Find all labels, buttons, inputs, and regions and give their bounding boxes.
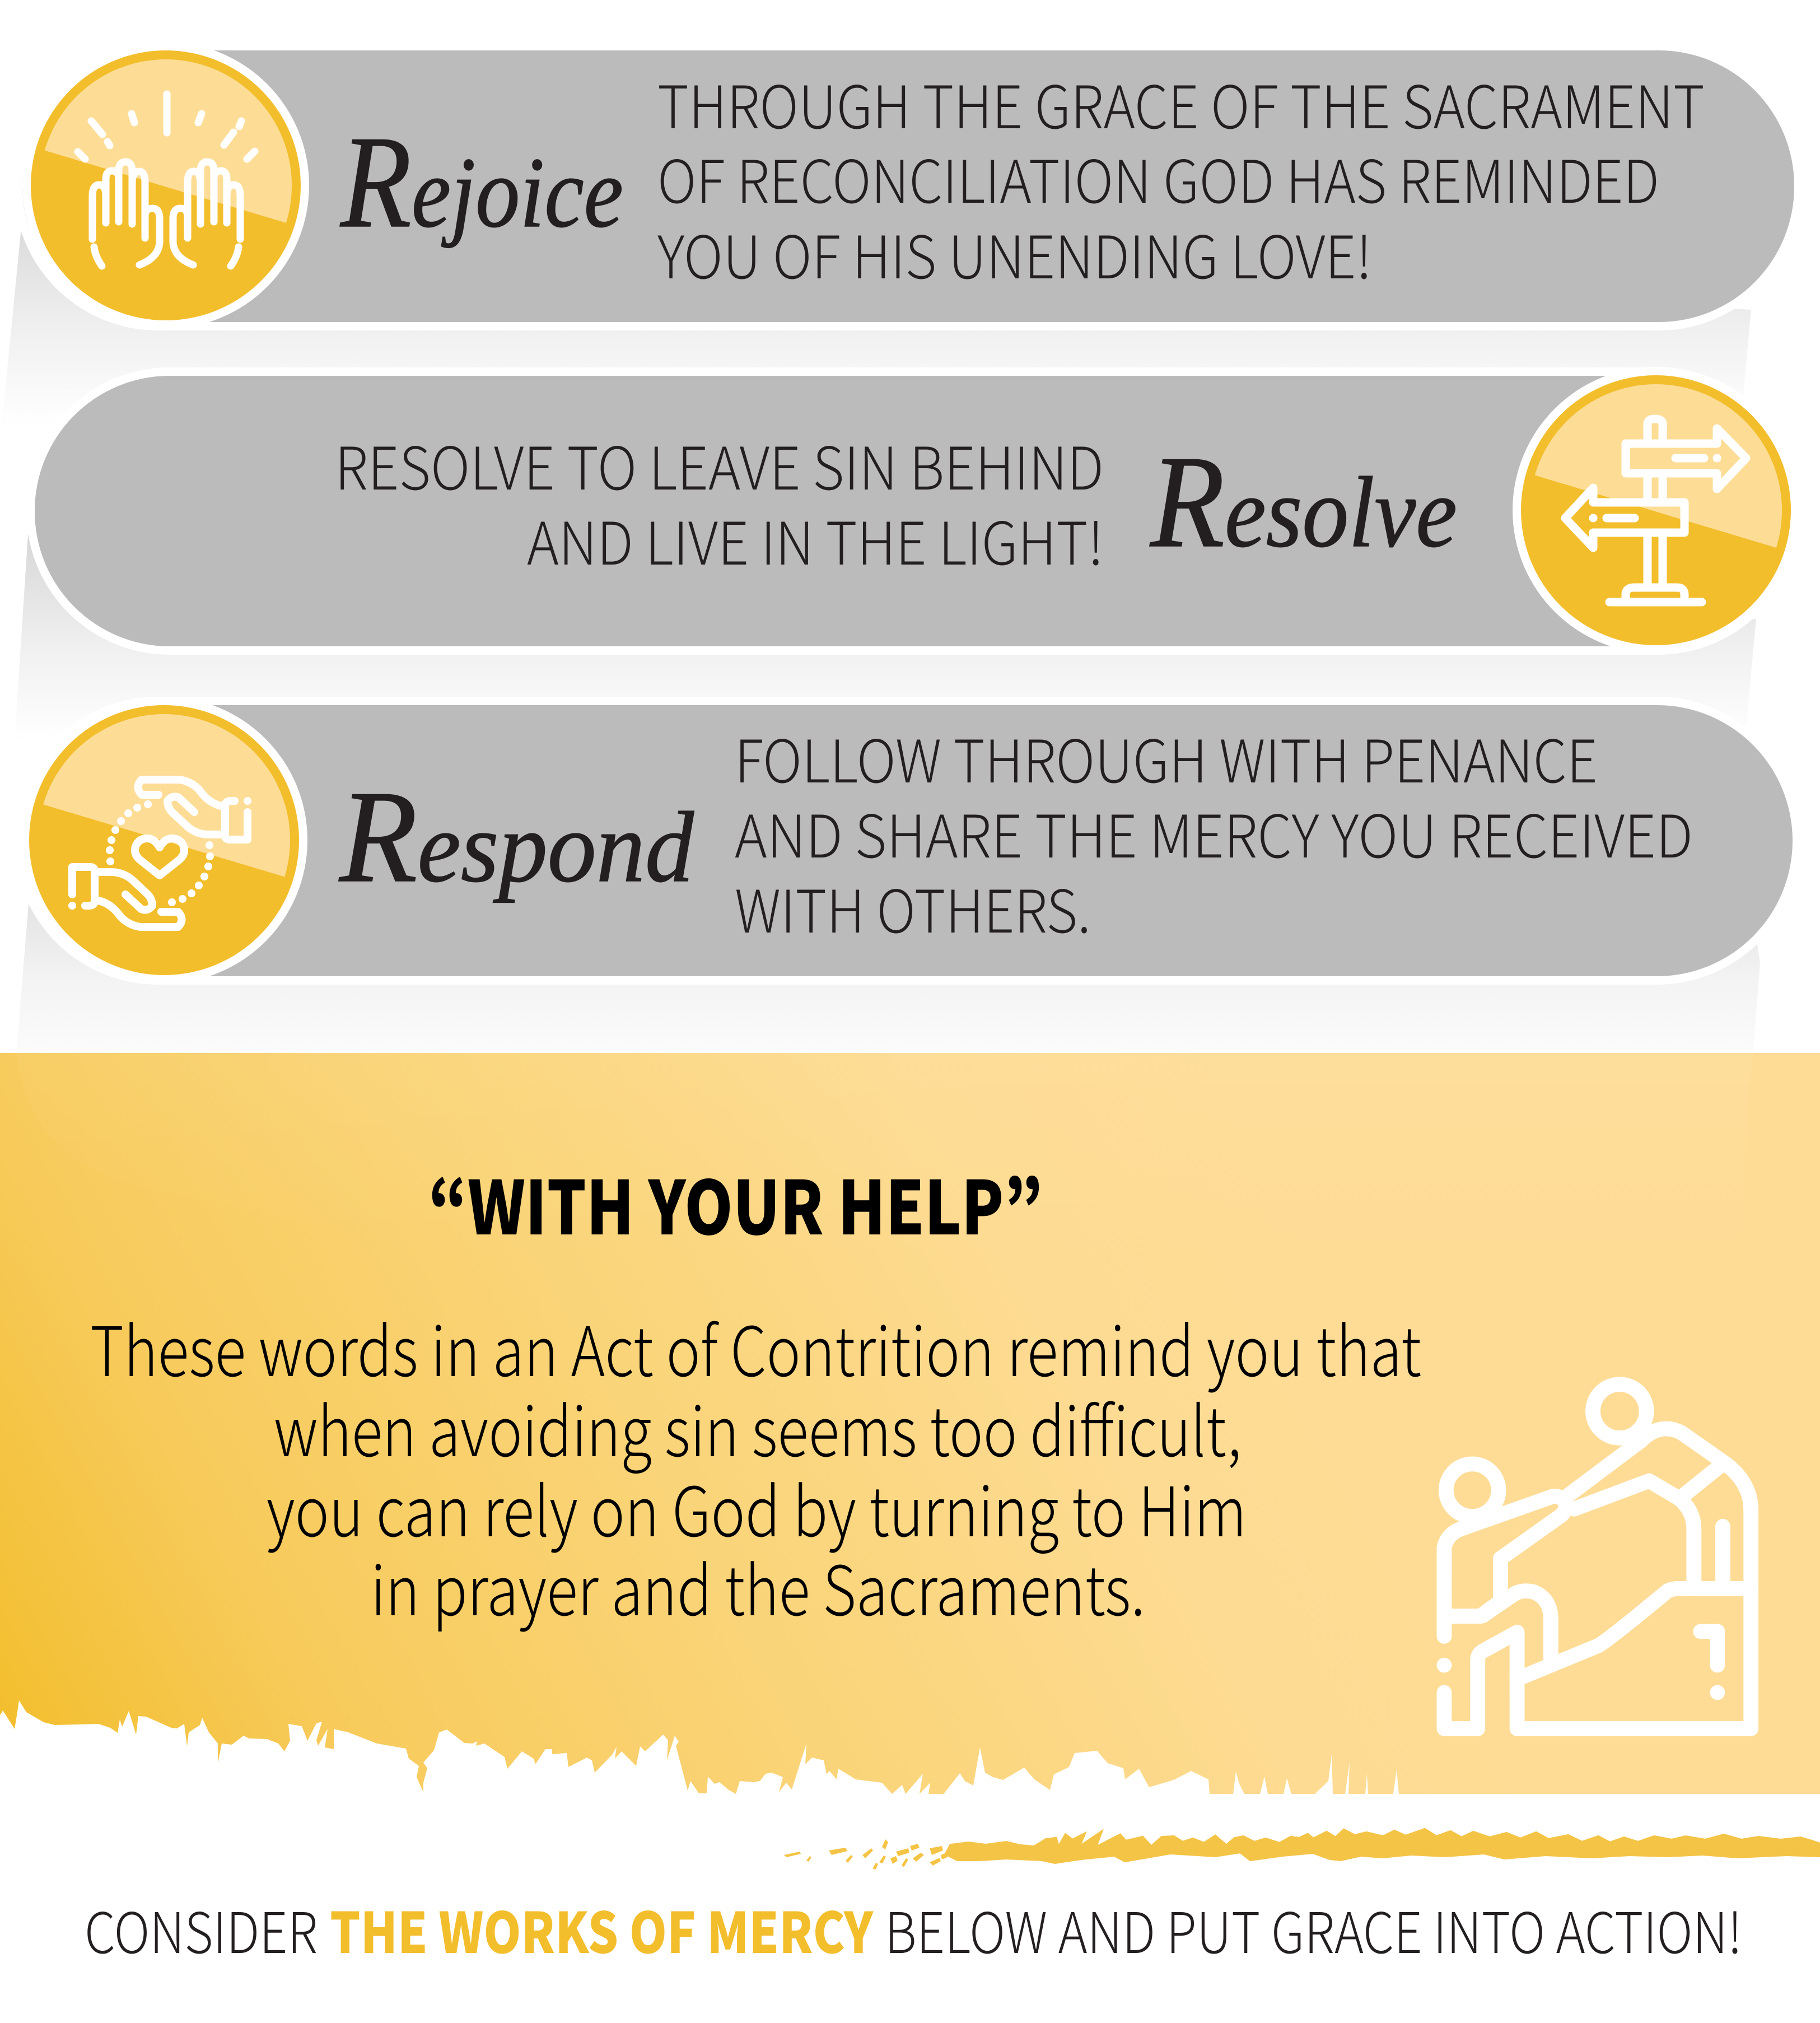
text: act of contrition paragraph: when avoiding sin seems too difficult, xyxy=(274,1377,1242,1476)
drop shadow: third banner xyxy=(16,891,1760,1054)
icon: signpost xyxy=(1513,367,1793,646)
heading: with your help: “WITH YOUR HELP” xyxy=(428,1149,1043,1256)
heading: resolve: Resolve xyxy=(1149,429,1457,575)
text: resolve body: RESOLVE TO LEAVE SIN BEHIND xyxy=(335,422,1104,507)
pill background xyxy=(22,50,1794,322)
text: act of contrition paragraph: in prayer and the Sacraments. xyxy=(371,1536,1145,1635)
panel: shadow overlay on panel top xyxy=(16,1053,1753,1266)
text: rejoice body: THROUGH THE GRACE OF THE SACRAMENT xyxy=(657,60,1705,146)
icon: raised hands xyxy=(22,50,309,322)
banner: rejoice xyxy=(0,42,1794,329)
call to action xyxy=(85,1888,1742,1969)
heading: rejoice: Rejoice xyxy=(339,109,623,255)
icon: climbers helping hand xyxy=(1444,1385,1751,1729)
text: act of contrition paragraph: These words in an Act of Contrition remind you that xyxy=(90,1297,1421,1396)
text: rejoice body xyxy=(657,60,1705,296)
drop shadow: second banner xyxy=(15,535,1756,739)
call to action: THE WORKS OF MERCY xyxy=(330,1888,874,1969)
heading: respond: Respond xyxy=(338,764,694,910)
panel: with your help background xyxy=(0,1053,1820,1794)
pill background xyxy=(35,376,1793,646)
text: rejoice body: YOU OF HIS UNENDING LOVE! xyxy=(657,211,1372,296)
text: resolve body: AND LIVE IN THE LIGHT! xyxy=(527,497,1104,582)
call to action: CONSIDER xyxy=(85,1888,318,1969)
text: resolve body xyxy=(335,422,1104,582)
torn paper edge xyxy=(0,1700,1820,2023)
banner: resolve xyxy=(35,367,1820,654)
text: respond body xyxy=(735,715,1693,950)
text: respond body: FOLLOW THROUGH WITH PENANCE xyxy=(735,715,1598,800)
text: rejoice body: OF RECONCILIATION GOD HAS REMINDED xyxy=(657,135,1659,220)
icon: hands and heart xyxy=(21,697,314,983)
text: respond body: AND SHARE THE MERCY YOU RECEIVED xyxy=(735,790,1693,875)
text: act of contrition paragraph: you can rely on God by turning to Him xyxy=(267,1457,1247,1556)
pill background xyxy=(22,705,1793,976)
text: act of contrition paragraph xyxy=(90,1297,1421,1635)
banner: respond xyxy=(21,697,1793,983)
drop shadow: first banner xyxy=(2,204,1751,426)
text: respond body: WITH OTHERS. xyxy=(735,865,1091,950)
brush stroke xyxy=(784,1830,1820,1870)
